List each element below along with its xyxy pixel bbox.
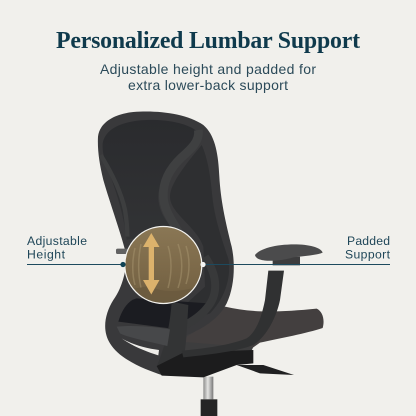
right label: Padded [347,234,390,248]
icon: up-down arrow [143,233,160,294]
right label: Support [345,248,391,262]
lumbar support tray [117,326,170,346]
lower mesh opening [118,298,208,328]
front frame strut [157,302,188,367]
lumbar ribs [132,244,192,290]
arm post [182,271,284,357]
left label [27,234,87,262]
lumbar magnifier [125,226,202,310]
left frame strap [101,155,127,237]
subtitle: extra lower-back support [128,77,288,93]
right anchor dot [200,262,206,267]
lower frame curve [183,257,215,326]
chair back frame [98,111,234,375]
leader line [27,264,390,266]
chair illustration [98,111,324,416]
arm pad [255,244,323,261]
title: Personalized Lumbar Support [56,28,360,54]
seat cushion [177,307,324,358]
subtitle: Adjustable height and padded for [100,61,316,77]
front frame curve [163,130,199,232]
arm bracket [273,257,300,265]
right label [345,234,391,262]
left anchor dot [120,262,126,267]
mesh backrest [103,120,198,240]
chair mechanism base [157,350,294,377]
left label: Height [27,248,66,262]
subtitle [100,61,316,93]
left label: Adjustable [27,234,87,248]
left side bracket [116,249,129,254]
gas cylinder [201,377,217,416]
mesh backrest right panel [170,145,229,320]
white gap under lumbar [122,338,159,355]
